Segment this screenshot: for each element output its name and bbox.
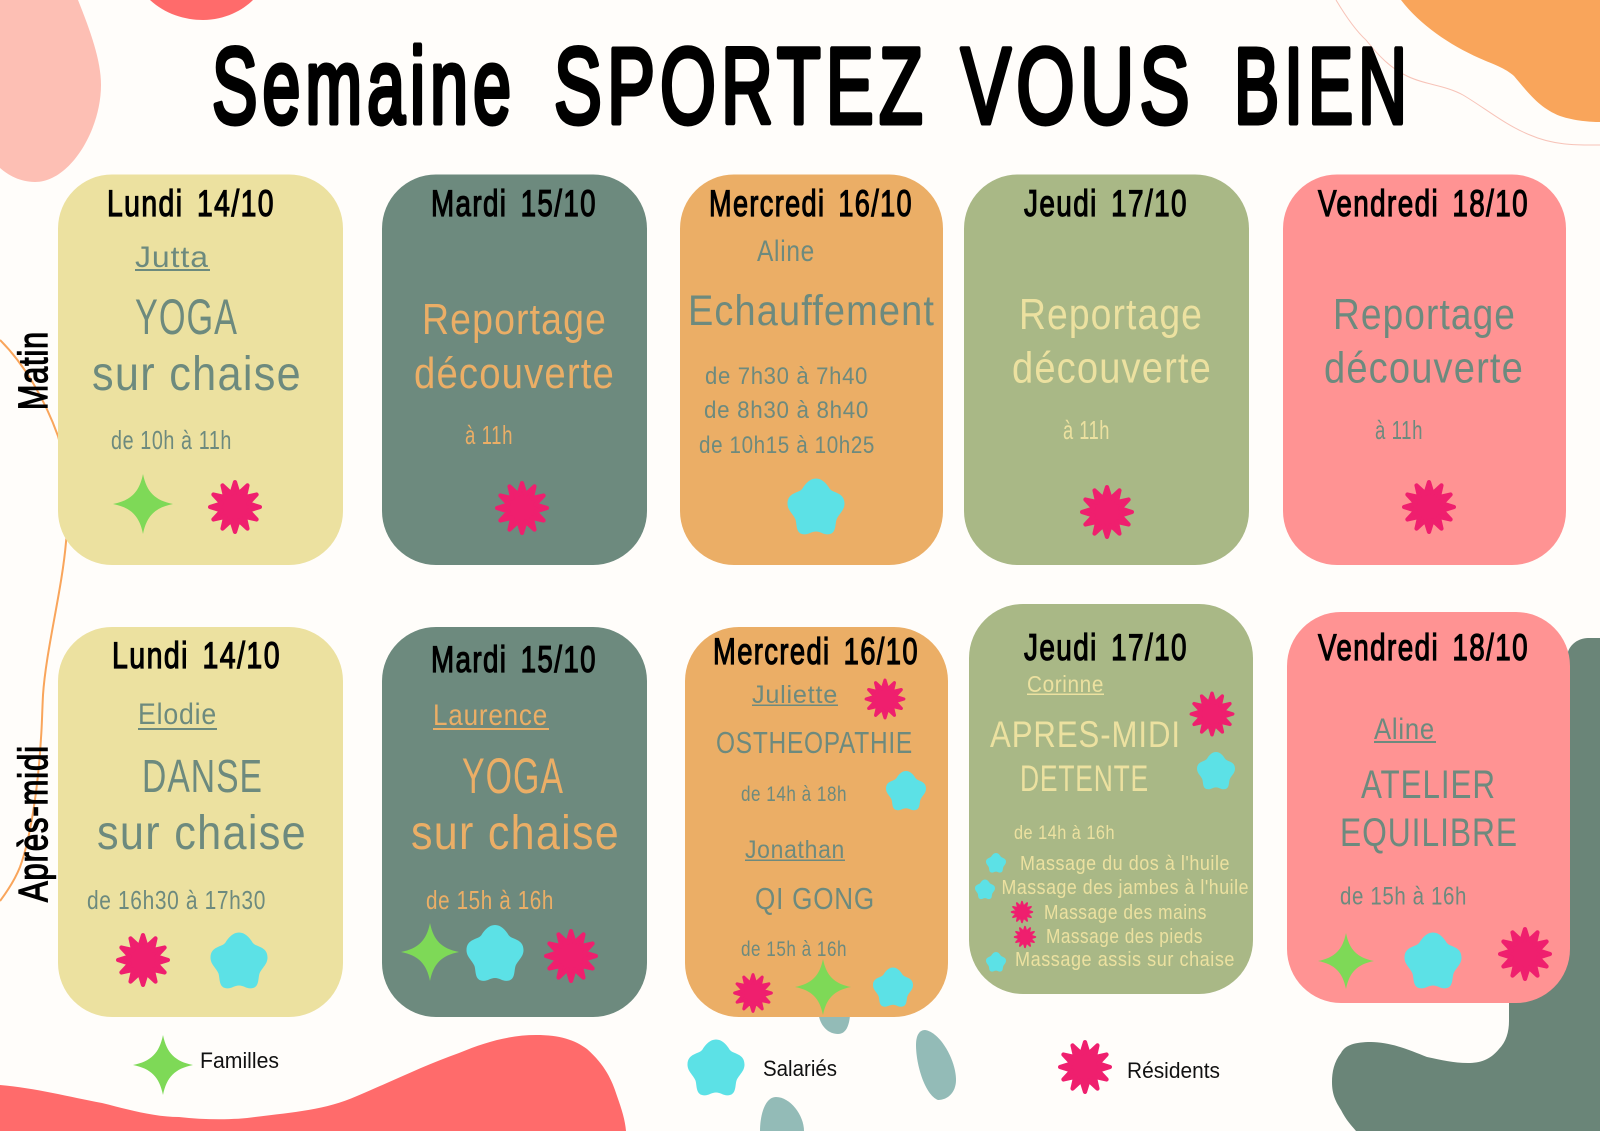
- icon: flower salaries: [986, 853, 1006, 873]
- time: de 16h30 à 17h30: [87, 885, 266, 915]
- legend: Familles: Familles: [200, 1048, 279, 1073]
- icon: star familles: [113, 474, 173, 534]
- activity: Danse: DANSE: [142, 750, 263, 802]
- instructor: Aline: Aline: [757, 235, 815, 268]
- activity: Reportage: Reportage: [422, 295, 607, 344]
- activity: sur chaise: sur chaise: [411, 807, 620, 860]
- activity: Detente: DETENTE: [1020, 758, 1149, 799]
- icon: burst residents: [1191, 693, 1233, 735]
- activity: Reportage: Reportage: [1019, 290, 1203, 339]
- instructor: Juliette: Juliette: [752, 681, 838, 709]
- icon: flower salaries: [210, 932, 268, 988]
- panel: Mardi apres-midi: [382, 627, 647, 1017]
- title: VOUS: [961, 25, 1195, 146]
- line: orange left: [0, 340, 68, 901]
- row label: Apres-midi: Après-midi: [10, 745, 56, 902]
- blob: orange top right: [1401, 0, 1600, 122]
- time: à 11h: [1063, 415, 1110, 445]
- panel: Jeudi matin: [964, 174, 1249, 565]
- panel: Lundi matin: [58, 174, 343, 565]
- massage list: Massage du dos à l'huile: [1020, 853, 1230, 875]
- heading: Vendredi: Vendredi 18/10: [1318, 627, 1529, 668]
- blob: teal small under card: [818, 1000, 850, 1034]
- activity: Yoga: YOGA: [462, 748, 564, 804]
- instructor: Corinne: Corinne: [1027, 671, 1104, 697]
- activity: sur chaise: sur chaise: [97, 807, 307, 860]
- icon: flower salaries: [975, 880, 995, 899]
- activity: découverte: découverte: [1324, 344, 1524, 392]
- icon: burst residents: [1012, 902, 1032, 922]
- time: de 10h à 11h: [111, 425, 232, 455]
- time: de 14h à 16h: [1014, 823, 1115, 844]
- time: de 15h à 16h: [741, 938, 847, 961]
- times: [699, 363, 875, 459]
- panel: Mardi matin: [382, 174, 647, 565]
- icon: burst residents: [1082, 487, 1132, 537]
- icon: flower salaries: [886, 771, 926, 810]
- heading: Jeudi: Jeudi 17/10: [1024, 627, 1188, 668]
- blob: pink top left: [0, 0, 101, 182]
- heading: Mardi: Mardi 15/10: [431, 183, 597, 224]
- line: pink top right: [1336, 0, 1600, 145]
- activity: Reportage: Reportage: [1333, 290, 1516, 339]
- activity: Echauffement: Echauffement: [688, 287, 935, 335]
- instructor: Elodie: Elodie: [138, 698, 217, 731]
- heading: Vendredi: Vendredi 18/10: [1318, 183, 1529, 224]
- panel: Mercredi matin: [680, 174, 943, 565]
- icon: burst residents: [735, 975, 771, 1011]
- legend: Salaries: [688, 1040, 837, 1095]
- blob: coral top: [150, 0, 253, 20]
- times: de 8h30 à 8h40: [704, 397, 869, 424]
- time: de 15h à 16h: [1340, 882, 1467, 910]
- massage list: Massage assis sur chaise: [1015, 949, 1235, 971]
- heading: Lundi: Lundi 14/10: [107, 183, 275, 224]
- icon: flower salaries: [873, 968, 913, 1007]
- icon: star familles: [1318, 933, 1374, 989]
- blob: teal bottom: [760, 1097, 804, 1131]
- row label: Matin: Matin: [10, 331, 56, 410]
- legend: Residents: [1060, 1042, 1220, 1092]
- icon: flower salaries: [1197, 752, 1235, 789]
- legend: Salaries: Salariés: [763, 1056, 837, 1081]
- icon: burst residents: [1500, 929, 1550, 979]
- panel: Mercredi apres-midi: [685, 627, 948, 1017]
- times: de 7h30 à 7h40: [705, 363, 868, 390]
- activity: Equilibre: EQUILIBRE: [1340, 811, 1518, 855]
- icon: burst residents: [210, 482, 260, 532]
- icon: star familles: [795, 959, 851, 1015]
- icon: flower salaries: [1404, 932, 1462, 988]
- times: de 10h15 à 10h25: [699, 432, 875, 459]
- icon: burst residents: [118, 935, 168, 985]
- legend: Residents: Résidents: [1127, 1058, 1220, 1083]
- blob: coral bottom: [0, 1035, 626, 1131]
- heading: Jeudi: Jeudi 17/10: [1024, 183, 1188, 224]
- activity: Apres-midi: APRES-MIDI: [990, 714, 1181, 755]
- instructor: Jutta: Jutta: [135, 241, 209, 274]
- title: BIEN: [1234, 25, 1412, 146]
- icon: burst residents: [497, 483, 547, 533]
- heading: Lundi: Lundi 14/10: [112, 635, 281, 676]
- time: à 11h: [1375, 415, 1423, 445]
- activity: Ostheopathie: OSTHEOPATHIE: [716, 725, 913, 760]
- activity: Atelier: ATELIER: [1361, 763, 1496, 807]
- activity: découverte: découverte: [414, 349, 615, 398]
- heading: Mardi: Mardi 15/10: [431, 639, 597, 680]
- panel: Vendredi apres-midi: [1287, 612, 1570, 1003]
- icon: star familles: [401, 923, 459, 981]
- time: de 15h à 16h: [426, 885, 554, 915]
- activity: découverte: découverte: [1012, 344, 1212, 392]
- blob: teal oval: [916, 1030, 956, 1100]
- massage list: Massage des pieds: [1046, 926, 1203, 948]
- icon: burst residents: [1015, 927, 1035, 947]
- panel: Vendredi matin: [1283, 174, 1566, 565]
- panel: Lundi apres-midi: [58, 627, 343, 1017]
- massage list: Massage des mains: [1044, 902, 1207, 924]
- title: Semaine: [212, 25, 516, 146]
- icon: burst residents: [1404, 482, 1454, 532]
- legend: Familles: [133, 1035, 279, 1095]
- instructor: Aline: Aline: [1374, 713, 1435, 746]
- massage list: Massage des jambes à l'huile: [1002, 877, 1249, 899]
- panel: Jeudi apres-midi: [969, 604, 1253, 994]
- icon: burst residents: [546, 931, 596, 981]
- heading: Mercredi: Mercredi 16/10: [709, 183, 913, 224]
- time: à 11h: [465, 420, 513, 450]
- icon: flower salaries: [788, 478, 844, 534]
- title: [212, 25, 1412, 146]
- activity: Yoga: YOGA: [135, 289, 238, 345]
- instructor: Laurence: Laurence: [433, 699, 548, 732]
- time: de 14h à 18h: [741, 783, 847, 806]
- heading: Mercredi: Mercredi 16/10: [713, 631, 919, 672]
- blob: dark green bottom right: [1332, 638, 1600, 1131]
- icon: flower salaries: [466, 925, 524, 981]
- icon: burst residents: [866, 680, 904, 718]
- massage list: [1002, 853, 1249, 971]
- activity: Qi Gong: QI GONG: [755, 881, 875, 916]
- instructor: Jonathan: Jonathan: [745, 836, 845, 864]
- icon: flower salaries: [986, 952, 1006, 972]
- activity: sur chaise: sur chaise: [92, 348, 302, 401]
- title: SPORTEZ: [554, 25, 928, 146]
